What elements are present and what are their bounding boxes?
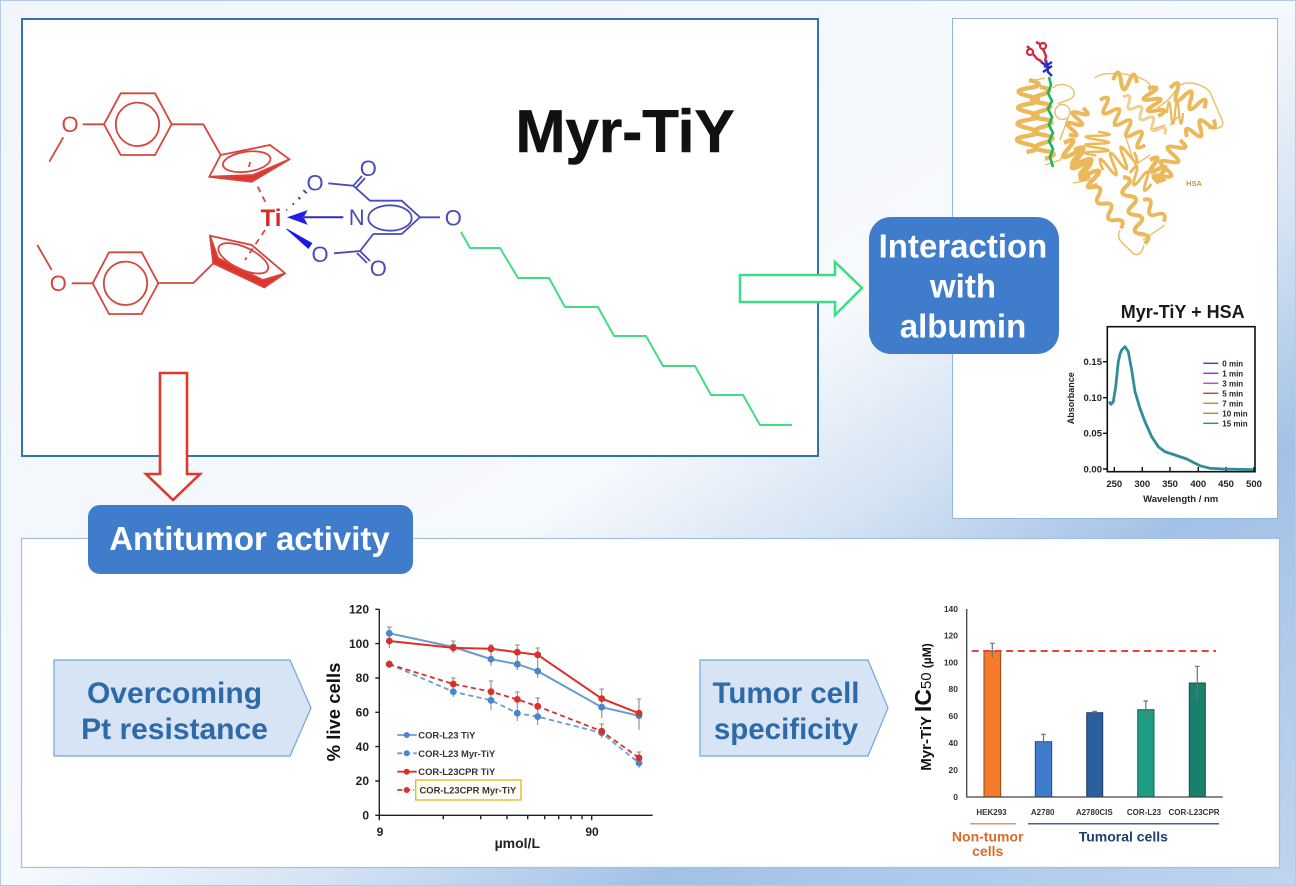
legend: 1 min — [1222, 369, 1243, 378]
x axis labels: COR-L23 — [1127, 808, 1162, 817]
callout: Tumor cell specificity: specificity — [714, 713, 859, 746]
label: O (carbonyl bottom): O — [370, 256, 387, 281]
label: O (upper methoxy): O — [61, 112, 79, 137]
series: COR-L23 TiY — [386, 630, 642, 719]
y axis labels: 60 — [949, 711, 958, 721]
callout: Overcoming Pt resistance — [54, 660, 311, 756]
legend: 10 min — [1222, 409, 1248, 418]
axes — [967, 609, 1223, 797]
y axis title: Absorbance — [1066, 372, 1076, 424]
y axis labels: 120 — [944, 630, 958, 640]
y axis labels — [1084, 357, 1103, 476]
badge: Antitumor activity: Antitumor activity — [109, 520, 390, 557]
molecule: green myristyl chain — [461, 232, 792, 425]
badge: Antitumor activity — [88, 505, 413, 574]
group label: Non-tumor cells: cells — [972, 843, 1003, 859]
callout: Overcoming Pt resistance: Pt resistance — [81, 713, 268, 746]
badge: Interaction with albumin: with — [929, 268, 996, 304]
y axis labels: 80 — [356, 671, 369, 685]
legend: COR-L23CPR TiY — [418, 766, 496, 777]
legend: 5 min — [1222, 389, 1243, 398]
y axis labels: 0.05 — [1084, 428, 1103, 440]
badge: Interaction with albumin: albumin — [900, 308, 1026, 344]
y axis labels: 140 — [944, 604, 958, 614]
y axis labels: 60 — [356, 706, 369, 720]
y axis labels: 40 — [356, 740, 369, 754]
panel: antitumor activity — [22, 538, 1280, 868]
y axis labels — [944, 604, 958, 802]
label: O (upper carboxylate): O — [306, 170, 324, 196]
x axis title: Wavelength / nm — [1143, 494, 1218, 505]
line chart: % live cells: 90 — [585, 825, 599, 839]
arrow: green to albumin — [740, 262, 862, 315]
x axis labels: A2780 — [1031, 808, 1055, 817]
y axis labels: 20 — [949, 765, 958, 775]
axes — [375, 609, 653, 820]
legend: COR-L23 TiY — [418, 730, 476, 740]
legend: 15 min — [1222, 419, 1248, 428]
y axis labels: 80 — [949, 684, 958, 694]
error bars — [990, 643, 1200, 749]
y axis labels: 40 — [949, 738, 958, 748]
ligand: green chain in protein — [1048, 77, 1053, 167]
bar chart: Myr-TiY IC50 — [910, 604, 1223, 859]
group underline: tumoral — [1028, 823, 1219, 825]
legend: 0 min — [1222, 359, 1243, 368]
molecule: red titanocene fragment — [37, 93, 289, 314]
y axis labels: 20 — [356, 774, 369, 788]
line chart: % live cells — [323, 602, 653, 851]
callout: Tumor cell specificity: Tumor cell — [713, 677, 859, 710]
y axis labels: 0 — [362, 808, 369, 822]
bars — [984, 651, 1205, 797]
series: COR-L23CPR TiY — [386, 638, 642, 717]
label: O (lower carboxylate): O — [311, 242, 329, 267]
protein: HSA ribbon structure — [1016, 72, 1223, 255]
y axis labels: 0 — [953, 792, 958, 802]
label: Ti: Ti — [261, 205, 281, 232]
x axis labels: 400 — [1190, 479, 1206, 490]
panel: albumin interaction — [952, 18, 1278, 518]
x axis labels: 350 — [1162, 479, 1178, 490]
x axis labels: 450 — [1218, 479, 1234, 490]
y axis title: % live cells — [323, 663, 344, 761]
x axis labels: HEK293 — [976, 808, 1007, 817]
callout: Tumor cell specificity — [700, 660, 888, 756]
arrow: red to antitumor activity — [146, 373, 200, 500]
error bars — [387, 627, 641, 768]
chart title: Myr-TiY + HSA — [1121, 302, 1245, 322]
badge: Interaction with albumin: Interaction — [879, 228, 1047, 264]
legend — [397, 730, 521, 800]
x axis labels: 500 — [1246, 479, 1262, 490]
badge: Interaction with albumin — [869, 217, 1059, 354]
x axis title: µmol/L — [495, 835, 540, 851]
y axis labels: 100 — [349, 637, 369, 651]
panel: molecule structure — [22, 19, 818, 456]
series: COR-L23 Myr-TiY — [386, 661, 642, 766]
x axis labels: COR-L23CPR — [1168, 808, 1220, 817]
y axis labels — [349, 602, 369, 822]
y axis labels: 0.15 — [1084, 357, 1103, 368]
callout: Overcoming Pt resistance: Overcoming — [87, 677, 262, 710]
chart: absorbance spectrum — [1066, 302, 1262, 505]
x axis labels — [976, 808, 1220, 817]
legend: 7 min — [1222, 399, 1243, 408]
group label: Non-tumor cells: Non-tumor — [952, 828, 1024, 844]
label: O (ether): O — [445, 206, 462, 230]
reference line — [972, 650, 1216, 652]
legend: 3 min — [1222, 379, 1243, 388]
ligand: red groups — [1027, 42, 1046, 62]
series: COR-L23CPR Myr-TiY — [386, 661, 642, 761]
y axis labels: 0.00 — [1084, 464, 1102, 476]
legend: COR-L23 Myr-TiY — [418, 748, 496, 759]
spectrum curve — [1109, 347, 1253, 470]
group label: Non-tumor cells — [952, 828, 1024, 859]
x axis labels: 300 — [1134, 479, 1150, 490]
x axis labels: A2780CIS — [1076, 808, 1113, 817]
legend — [1203, 359, 1248, 428]
y axis labels: 0.10 — [1084, 393, 1102, 404]
plot frame — [1107, 327, 1255, 472]
y axis labels: 120 — [349, 602, 369, 616]
molecule: blue dipicolinate ligand — [286, 176, 440, 263]
label: N: N — [349, 205, 365, 230]
x axis labels — [1106, 479, 1262, 490]
legend: COR-L23CPR Myr-TiY — [420, 784, 517, 796]
ligand: blue core — [1041, 60, 1052, 76]
group label: Tumoral cells: Tumoral cells — [1079, 828, 1168, 844]
title: Myr-TiY: Myr-TiY — [516, 98, 734, 165]
label: HSA: HSA — [1186, 179, 1202, 188]
x axis labels: 9 — [377, 825, 384, 839]
y axis labels: 100 — [944, 658, 958, 668]
x axis labels: 250 — [1106, 479, 1122, 490]
label: O (lower methoxy): O — [50, 271, 67, 296]
label: O (carbonyl top): O — [360, 156, 377, 181]
group underline: non-tumor — [970, 823, 1016, 825]
y axis title: Myr-TiY IC50 (µM) — [910, 643, 936, 771]
